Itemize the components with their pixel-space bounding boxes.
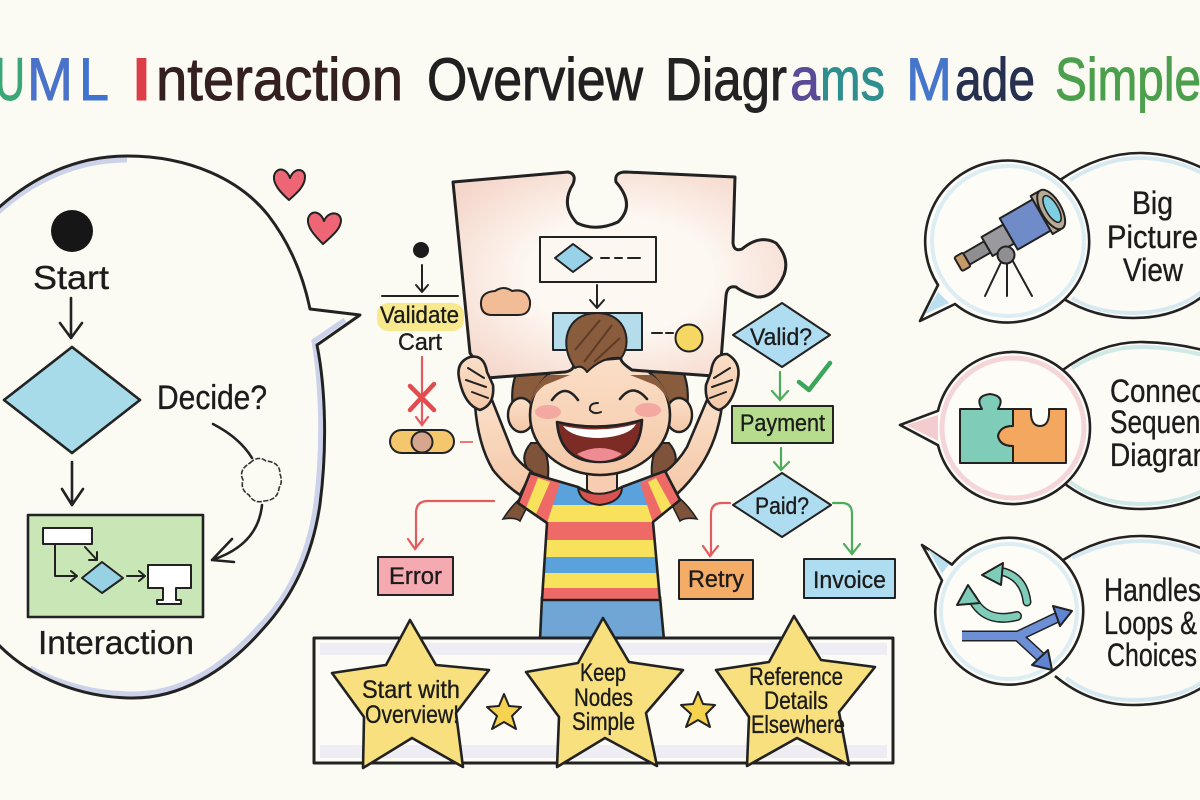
icon: orange puzzle piece	[998, 409, 1066, 463]
title: I	[129, 46, 154, 113]
star: reference details elsewhere: Reference	[749, 663, 843, 691]
eyes	[552, 390, 647, 400]
label: validate cart: Cart	[398, 329, 442, 356]
icon: loop arrows	[957, 563, 1027, 618]
panel: big picture bubble	[920, 153, 1200, 323]
upper pigtails	[524, 443, 548, 478]
node: paid	[733, 473, 831, 537]
icon: pill node	[390, 430, 454, 453]
connector	[652, 332, 673, 334]
sub-arrow	[590, 285, 604, 308]
face	[530, 355, 670, 475]
nose	[590, 403, 601, 413]
arrow: cloud to interaction	[212, 505, 262, 562]
flowchart: payment branch	[679, 303, 895, 599]
label: Start: Start	[33, 259, 109, 296]
title: M	[27, 46, 73, 113]
title: M	[906, 46, 952, 113]
node: payment	[732, 406, 833, 443]
arrow: valid to payment	[772, 372, 788, 400]
icon: right hand	[706, 354, 739, 410]
star: keep nodes simple: Nodes	[574, 684, 633, 712]
arrow: red	[416, 357, 428, 425]
arrow: decision to interaction	[62, 462, 83, 505]
sub-diagram box	[540, 237, 656, 282]
title: Overview	[427, 46, 644, 113]
blue box	[553, 313, 642, 350]
title: L	[79, 46, 109, 113]
title: nteraction	[156, 46, 403, 113]
icon: left hand	[458, 357, 493, 410]
label: validate cart: Validate	[380, 302, 459, 329]
neck	[587, 470, 617, 495]
icon: red cross	[410, 384, 434, 410]
ears	[508, 398, 534, 432]
panel: connect sequence bubble	[900, 342, 1200, 509]
arrow: paid to invoice	[833, 503, 860, 554]
star: keep nodes simple: Simple	[572, 708, 635, 736]
arrow: start to decision	[60, 298, 82, 338]
star: start with overview	[332, 620, 489, 768]
arrow: decide curve to cloud	[213, 424, 252, 458]
panel: handles loops bubble	[922, 536, 1200, 705]
node: retry	[679, 560, 753, 599]
star: small right	[681, 692, 715, 727]
node: invoice	[804, 559, 895, 598]
flowchart: payment branch: Valid?	[750, 324, 812, 351]
label: Interaction: Interaction	[38, 624, 194, 661]
icon: heart 2	[308, 212, 341, 244]
flowchart: payment branch: Payment	[740, 410, 825, 437]
icon: check mark	[799, 363, 830, 390]
star: small left	[487, 694, 521, 729]
circle node	[676, 324, 702, 352]
icon: fork arrows	[962, 606, 1072, 670]
shirt	[520, 472, 678, 599]
panel: interaction frame	[28, 515, 203, 617]
flowchart: validate cart branch	[377, 242, 494, 595]
cloud shape	[481, 288, 530, 315]
flowchart: payment branch: Paid?	[755, 493, 809, 520]
icon: cloud	[242, 458, 281, 502]
panel: tips banner	[314, 616, 893, 768]
fringe	[530, 375, 670, 405]
title: a	[790, 46, 821, 113]
title: Diagr	[665, 46, 787, 113]
flowchart: validate cart branch: Error	[389, 563, 442, 590]
star: keep nodes simple	[526, 618, 683, 767]
star: reference details elsewhere: Elsewhere	[751, 711, 845, 739]
flowchart: payment branch: Retry	[688, 566, 744, 593]
collar	[578, 487, 622, 505]
star: start with overview: Overview!	[365, 701, 459, 729]
title	[0, 46, 1200, 113]
icon: telescope	[947, 185, 1071, 296]
icon: heart 1	[274, 169, 305, 200]
title: ade	[955, 46, 1035, 113]
hair tuft	[566, 313, 627, 372]
arrow: payment to paid	[774, 448, 789, 470]
jeans	[540, 597, 664, 640]
star: reference details elsewhere: Details	[764, 687, 828, 715]
node: error	[378, 557, 453, 595]
star: keep nodes simple: Keep	[580, 659, 626, 687]
arms	[475, 400, 532, 495]
arrow: to error	[408, 501, 494, 549]
text: big picture view: View	[1123, 252, 1184, 288]
mouth	[557, 420, 642, 462]
star: reference details elsewhere	[716, 616, 875, 766]
hair back	[512, 370, 688, 420]
lower pigtails	[503, 497, 527, 521]
flowchart: payment branch: Invoice	[813, 567, 886, 594]
panel: left speech bubble	[0, 156, 360, 698]
star: start with overview: Start with	[362, 676, 460, 704]
icon: start node	[51, 210, 93, 252]
node: valid	[733, 303, 830, 367]
icon: teal puzzle piece	[960, 394, 1013, 463]
element: girl figure behind puzzle	[475, 355, 722, 640]
text: big picture view: Big	[1132, 185, 1173, 221]
label: Decide?: Decide?	[157, 379, 267, 417]
element: puzzle piece	[453, 172, 786, 378]
icon: decision diamond	[4, 347, 140, 453]
cheeks	[535, 405, 561, 419]
arrow: paid to retry	[703, 503, 730, 556]
title: ms	[820, 46, 885, 113]
